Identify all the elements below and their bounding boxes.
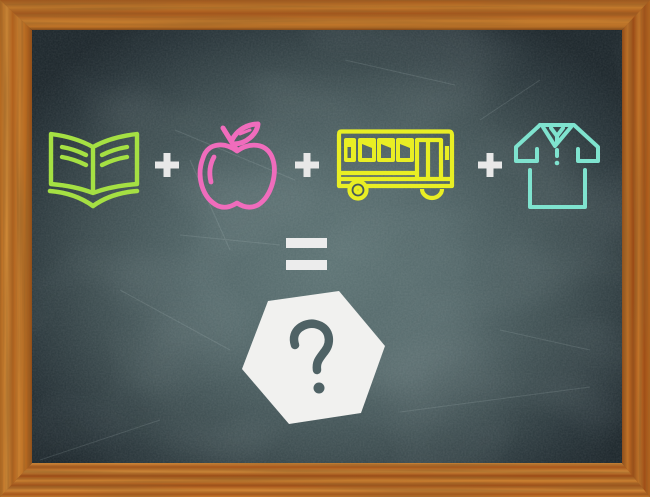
icon: book [50,134,137,206]
equals sign [286,238,327,270]
icon: polo shirt [516,125,598,207]
question mark [294,324,329,394]
frame: left rail [0,0,32,497]
bus windows [344,138,414,162]
hexagon with question mark [242,291,385,424]
frame: right rail [622,0,650,497]
plus sign 3 [478,153,502,177]
frame: bottom rail [0,463,650,497]
icon: school bus [339,132,452,198]
frame: top rail [0,0,650,30]
icon: apple [200,124,274,207]
shirt button [555,161,559,165]
plus sign 2 [295,153,319,177]
plus sign 1 [155,153,179,177]
